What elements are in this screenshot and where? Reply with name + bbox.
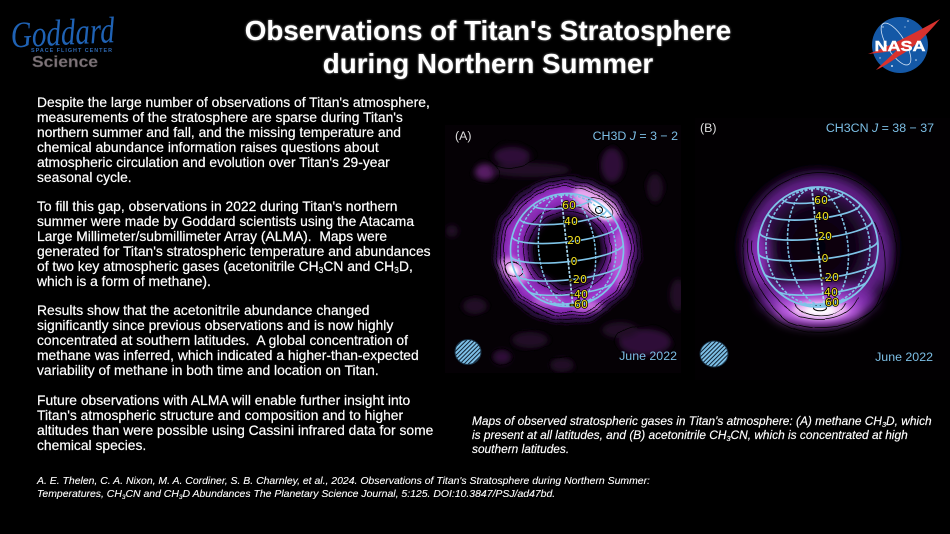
panel B latitude labels: 0 — [822, 252, 828, 265]
figure caption: is present at all latitudes, and (B) acetonitrile CH3CN, which is concentrated at high — [472, 428, 908, 443]
panel A labels: June 2022 — [619, 349, 677, 363]
panel A latitude labels: 40 — [564, 215, 578, 228]
panel A latitude labels: 20 — [567, 234, 581, 247]
text block: future: altitudes than were possible using Cassini infrared data for some — [37, 422, 433, 438]
panel B beam ellipse — [700, 341, 728, 367]
panel A beam ellipse — [455, 340, 481, 364]
emission ring — [491, 174, 643, 326]
logo: Goddard Science: SPACE FLIGHT CENTER — [31, 48, 112, 54]
panel A latitude labels: 60 — [562, 199, 576, 212]
text block: future — [37, 392, 433, 454]
text block: background — [37, 94, 430, 186]
citation: A. E. Thelen, C. A. Nixon, M. A. Cordiner, S. B. Charnley, et al., 2024. Observations of Titan's Stratosphere during Northern Summer: — [37, 476, 650, 487]
panel B labels: (B) — [700, 121, 717, 135]
panel B labels: June 2022 — [875, 350, 933, 364]
text block: observations: of two key atmospheric gases (acetonitrile CH3CN and CH3D, — [37, 258, 413, 275]
text block: results: variability of methane in both time and location on Titan. — [37, 362, 379, 378]
panel A latitude labels: -40 — [570, 288, 588, 301]
panel A latitude labels — [562, 199, 588, 311]
panel B: CH3CN map — [695, 118, 950, 380]
panel B latitude labels: -20 — [821, 271, 839, 284]
text block: results: significantly since previous observations and is now highly — [37, 317, 393, 333]
text block: future: chemical species. — [37, 437, 146, 453]
text block: background: atmospheric circulation and evolution over Titan's 29-year — [37, 154, 390, 170]
panel A labels: (A) — [455, 129, 472, 143]
panel B globe grid — [752, 181, 884, 313]
panel A labels — [455, 129, 678, 363]
text block: observations — [36, 198, 431, 290]
text block: results: concentrated at southern latitudes. A global concentration of — [37, 332, 408, 348]
citation — [36, 476, 650, 501]
outer glow — [734, 166, 902, 334]
text block: observations: generated for Titan's stratospheric temperature and abundances — [37, 243, 431, 259]
panel A latitude labels: 0 — [570, 255, 578, 268]
panel B latitude labels — [814, 194, 839, 309]
contour lines — [743, 173, 897, 333]
panel B labels — [700, 121, 934, 364]
panel B latitude labels: 40 — [815, 210, 829, 223]
left and right limb brightening — [750, 228, 887, 318]
text block: background: seasonal cycle. — [37, 169, 132, 185]
background contours — [459, 141, 675, 374]
logo: NASA meatball: NASA — [874, 38, 926, 55]
text block: future: Future observations with ALMA will enable further insight into — [37, 392, 410, 408]
title: Observations of Titan's Stratosphere — [245, 15, 731, 46]
panel B latitude labels: 60 — [825, 296, 839, 309]
ring hot spots — [495, 181, 628, 311]
logo: Goddard Science: Goddard — [10, 10, 116, 57]
panel A latitude labels: -60 — [570, 298, 588, 311]
graphics: maps and logos — [12, 16, 940, 373]
panel A globe grid — [505, 188, 629, 312]
panel A labels: CH3D J = 3 − 2 — [593, 129, 678, 143]
logo: NASA meatball — [868, 17, 940, 73]
text block: background: Despite the large number of observations of Titan's atmosphere, — [37, 94, 430, 110]
panel B latitude labels: 60 — [814, 194, 828, 207]
text block: future: Titan's atmospheric structure and composition and to higher — [37, 407, 403, 423]
panel B labels: CH3CN J = 38 − 37 — [826, 121, 934, 135]
figure caption: southern latitudes. — [472, 442, 569, 456]
panel A: CH3D map — [445, 125, 686, 374]
figure caption: Maps of observed stratospheric gases in Titan's atmosphere: (A) methane CH3D, which — [472, 414, 932, 429]
text block: background: northern summer and fall, and the missing temperature and — [37, 124, 401, 140]
logo: Goddard Science: Science — [32, 54, 98, 71]
text block: background: chemical abundance information raises questions about — [37, 139, 379, 155]
title — [244, 15, 732, 80]
panel B latitude labels: 20 — [818, 230, 832, 243]
text block: results: methane was inferred, which indicated a higher-than-expected — [37, 347, 419, 363]
contour lines — [493, 176, 641, 324]
text block: observations: which is a form of methane). — [37, 273, 211, 289]
panel A latitude labels: -20 — [569, 273, 587, 286]
text block: observations: summer were made by Goddard scientists using the Atacama — [37, 213, 414, 229]
text block: results — [36, 302, 419, 378]
south polar bright spot — [774, 295, 862, 325]
text block: results: Results show that the acetonitrile abundance changed — [37, 302, 369, 318]
background noise emission patches — [446, 147, 686, 372]
figure caption — [472, 414, 932, 456]
text block: background: measurements of the stratosphere are sparse during Titan's — [37, 109, 403, 125]
logo: Goddard Science — [10, 10, 116, 71]
title: during Northern Summer — [323, 48, 653, 79]
text block: observations: To fill this gap, observations in 2022 during Titan's northern — [37, 198, 397, 214]
panel B latitude labels: 40 — [824, 286, 838, 299]
text block: observations: Large Millimeter/submillimeter Array (ALMA). Maps were — [37, 228, 387, 244]
citation: Temperatures, CH3CN and CH3D Abundances The Planetary Science Journal, 5:125. DOI:10.3847/PSJ/ad47bd. — [37, 489, 555, 501]
